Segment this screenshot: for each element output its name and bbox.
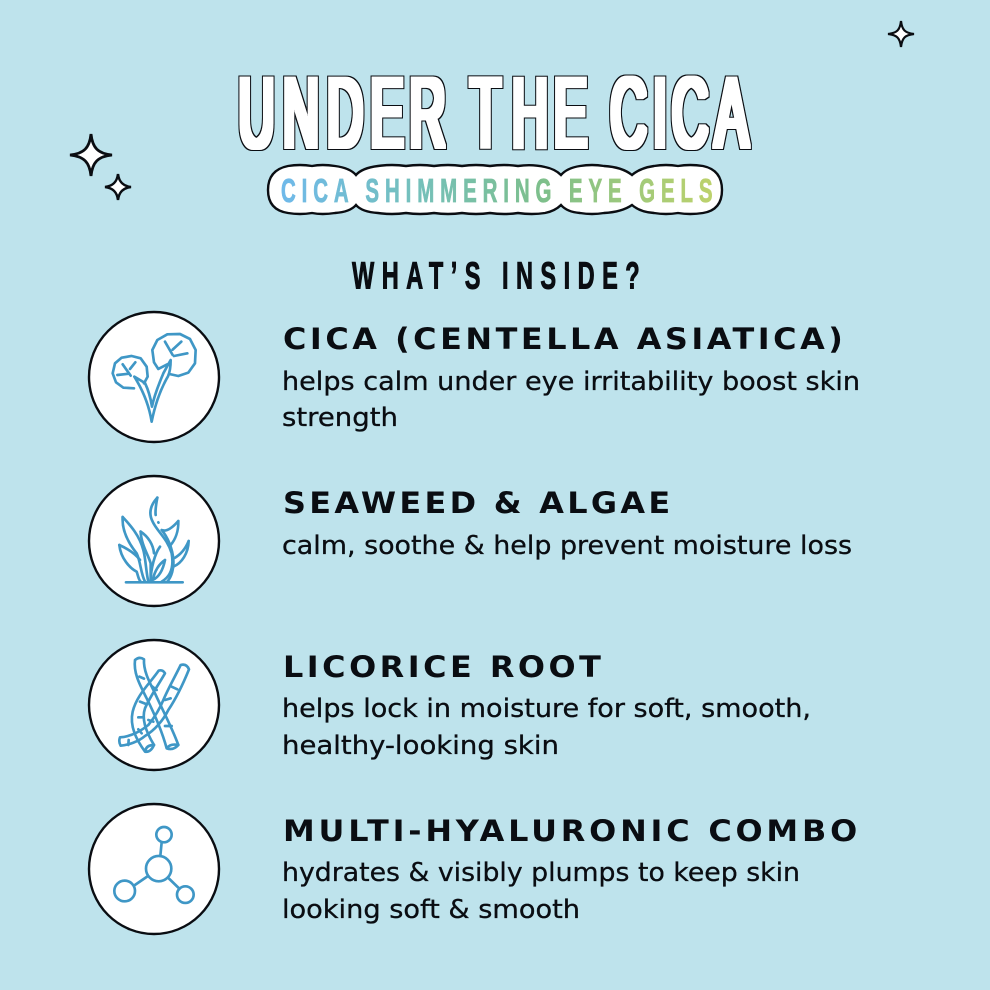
section heading: WHAT’S INSIDE?	[352, 254, 640, 297]
description: hyaluronic: looking soft & smooth	[282, 895, 580, 925]
description: hyaluronic	[282, 858, 800, 925]
icon: seaweed	[89, 476, 219, 606]
description: licorice: helps lock in moisture for soft, smooth,	[282, 694, 811, 724]
icon: small sparkle left	[105, 174, 131, 200]
icon: centella leaves	[89, 312, 219, 442]
description: hyaluronic: hydrates & visibly plumps to keep skin	[282, 858, 800, 888]
icon: licorice root	[89, 640, 219, 770]
description: cica: strength	[282, 403, 398, 433]
description: seaweed: calm, soothe & help prevent moisture loss	[282, 531, 852, 561]
subtitle text: CICA SHIMMERING EYE GELS	[281, 172, 713, 209]
icon: molecule	[89, 804, 219, 934]
ingredient: cica	[282, 323, 860, 433]
description: licorice	[282, 694, 811, 761]
heading: licorice: LICORICE ROOT	[283, 651, 601, 685]
description: licorice: healthy-looking skin	[282, 731, 559, 761]
description: cica	[282, 367, 860, 433]
heading: seaweed: SEAWEED & ALGAE	[283, 487, 670, 521]
title: UNDER THE CICA	[239, 57, 749, 169]
ingredient: hyaluronic	[282, 815, 857, 925]
heading: cica: CICA (CENTELLA ASIATICA)	[283, 323, 843, 357]
icon: large sparkle left	[70, 134, 112, 176]
subtitle badge	[268, 165, 722, 214]
ingredient: licorice	[282, 651, 811, 761]
ingredient: seaweed	[282, 487, 852, 561]
description: cica: helps calm under eye irritability boost skin	[282, 367, 860, 397]
icon: sparkle top right	[888, 21, 914, 47]
heading: hyaluronic: MULTI-HYALURONIC COMBO	[283, 815, 857, 849]
